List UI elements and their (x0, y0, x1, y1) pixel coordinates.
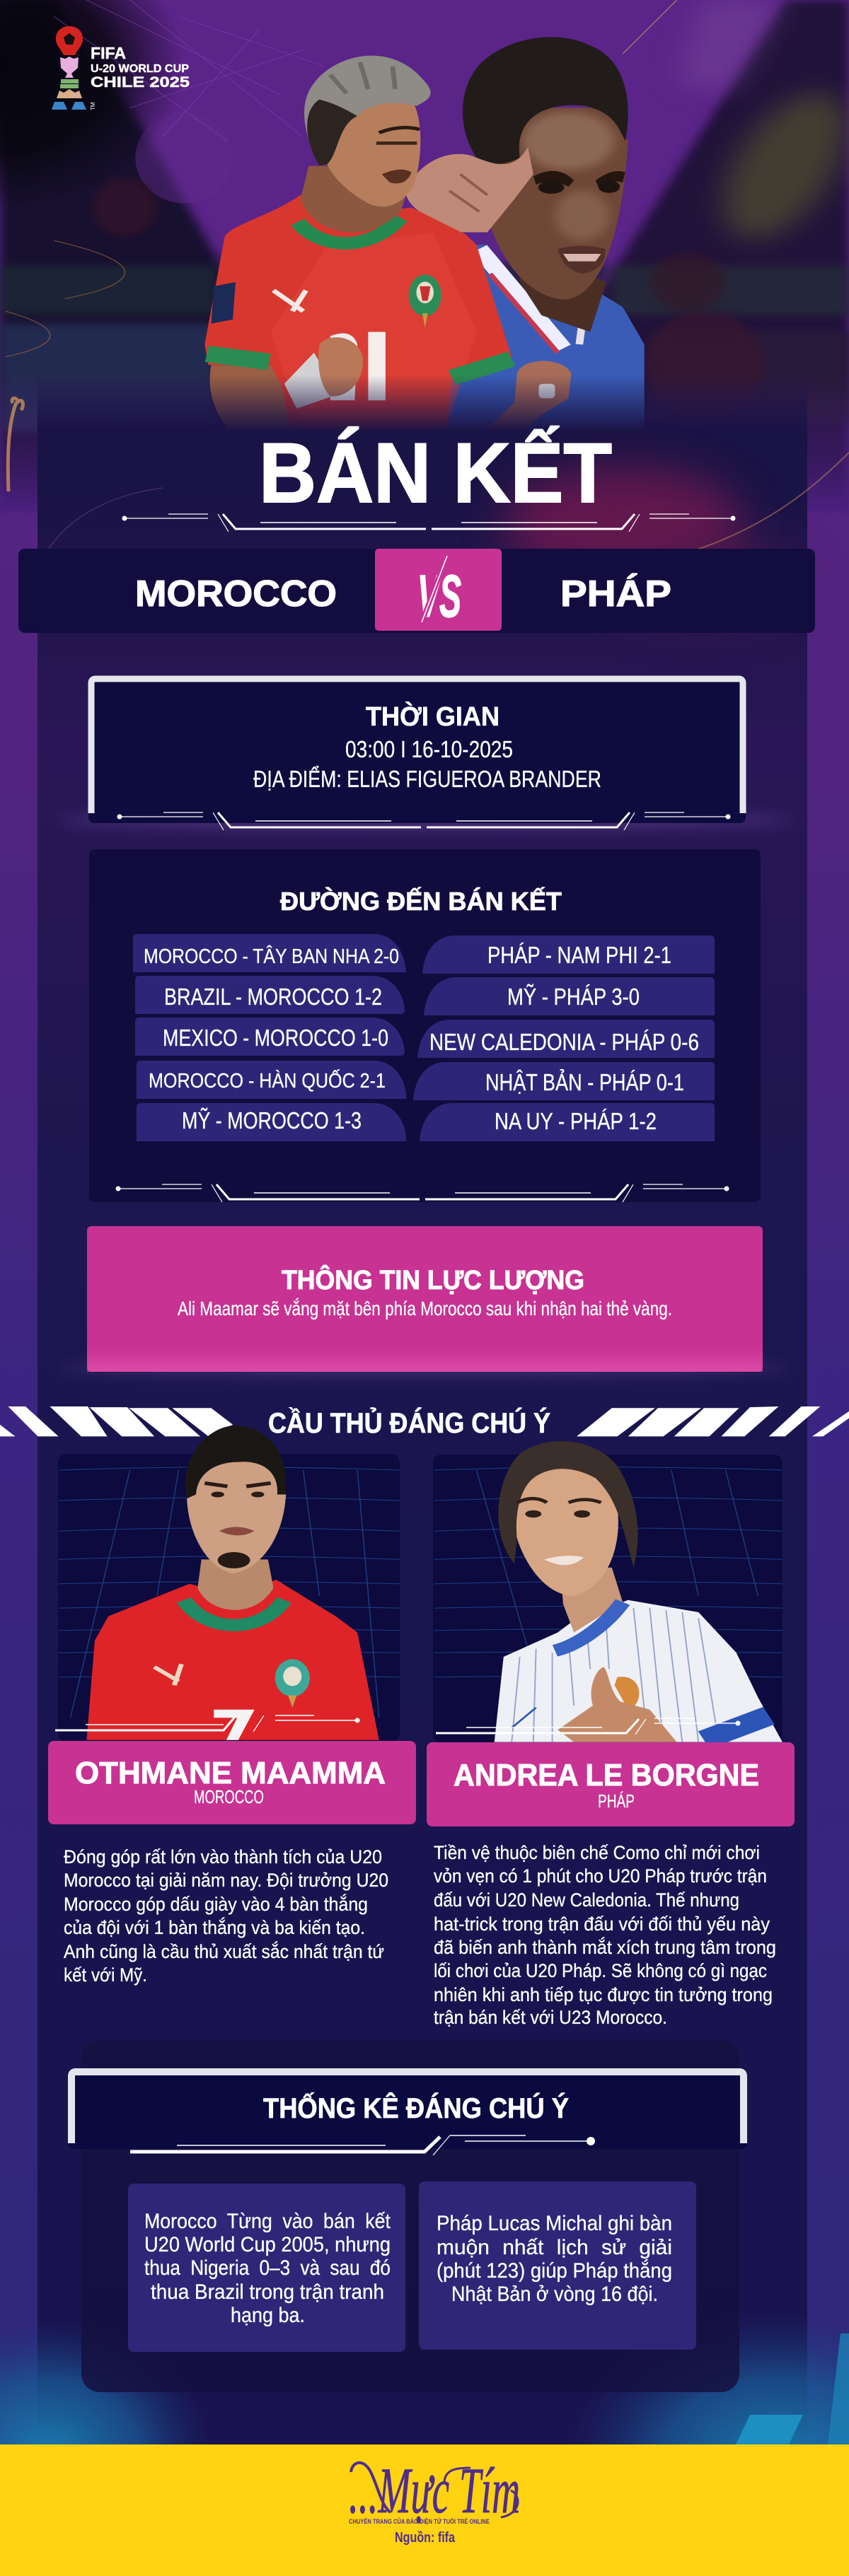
centre column (37, 488, 807, 2576)
player text: Đóng góp rất lớn vào thành tích của U20 (64, 1846, 382, 1867)
stat box: France: muộn nhất lịch sử giải (437, 2236, 672, 2259)
panel: Andrea Le Borgne (427, 1441, 795, 2028)
decorative grid lines (59, 1467, 400, 1718)
Morocco results: MỸ - MOROCCO 1-3 (182, 1107, 362, 1133)
stat box: Morocco: thua Nigeria 0–3 và sau đó (144, 2256, 391, 2280)
stat box: France: (phút 123) giúp Pháp thắng (437, 2259, 672, 2283)
stat box: Morocco: thua Brazil trong trận tranh (151, 2280, 384, 2304)
player text: của đội với 1 bàn thắng và ba kiến tạo. (64, 1916, 365, 1938)
player text: trận bán kết với U23 Morocco. (434, 2007, 667, 2028)
heading: squad news: THÔNG TIN LỰC LƯỢNG (282, 1264, 584, 1295)
panel: road to semifinal (89, 849, 761, 1202)
squad news text: Ali Maamar sẽ vắng mặt bên phía Morocco sau khi nhận hai thẻ vàng. (178, 1298, 672, 1319)
name plate: ANDREA LE BORGNE (454, 1758, 759, 1793)
stat box: Morocco (128, 2184, 405, 2352)
logo: Mực Tím (349, 2454, 520, 2527)
panel: squad news (57, 1226, 792, 1375)
hero background: stadium scene (0, 0, 849, 556)
player photo (86, 1426, 379, 1740)
name plate: OTHMANE MAAMMA (75, 1756, 386, 1790)
heading: players to watch: CẦU THỦ ĐÁNG CHÚ Ý (268, 1406, 550, 1439)
Morocco results (133, 934, 406, 1141)
hero lower fade (8, 375, 849, 622)
stat box: France: Nhật Bản ở vòng 16 đội. (451, 2283, 658, 2306)
player text: hat-trick trong trận đấu với đối thủ yếu này (434, 1913, 770, 1935)
France results: MỸ - PHÁP 3-0 (507, 984, 640, 1010)
stat box: Morocco: hạng ba. (231, 2304, 305, 2327)
logo: FIFA U-20 World Cup Chile 2025: CHILE 2025 (91, 74, 190, 91)
France results: NEW CALEDONIA - PHÁP 0-6 (429, 1029, 699, 1055)
player text: vỏn vẹn có 1 phút cho U20 Pháp trước trận (434, 1865, 767, 1887)
match bar (18, 549, 815, 633)
Morocco results: BRAZIL - MOROCCO 1-2 (164, 984, 382, 1010)
stat box: France (419, 2181, 696, 2350)
player text: kết với Mỹ. (64, 1964, 147, 1986)
player text (434, 1842, 776, 2028)
title: BÁN KẾT: BÁN KẾT (259, 426, 612, 520)
France results (413, 936, 715, 1141)
player text: Tiền vệ thuộc biên chế Como chỉ mới chơi (434, 1842, 760, 1863)
background: blue light at the bottom (0, 2326, 849, 2444)
VS badge: VS (417, 563, 461, 629)
stat box: Morocco: Morocco Từng vào bán kết (144, 2210, 391, 2233)
hero players (204, 37, 645, 440)
player text: nhiên khi anh tiếp tục được tin tưởng trong (434, 1984, 773, 2005)
panel: notable stats (68, 2040, 747, 2392)
panel: Othmane Maamma (48, 1426, 416, 1986)
name plate: PHÁP (598, 1790, 635, 1812)
section banner: players to watch (0, 1406, 849, 1439)
logo: FIFA U-20 World Cup Chile 2025: FIFA (91, 44, 126, 62)
France results: PHÁP - NAM PHI 2-1 (487, 942, 671, 968)
logo: FIFA U-20 World Cup Chile 2025: U-20 WORLD CUP (91, 63, 189, 75)
Morocco player (204, 56, 512, 440)
icon: trophy (52, 26, 86, 110)
logo: Mực Tím: ...Mực Tím (349, 2454, 520, 2527)
player text: Morocco góp dấu giày vào 4 bàn thắng (64, 1893, 368, 1915)
name plate (48, 1741, 416, 1824)
stat box: France: Pháp Lucas Michal ghi bàn (437, 2212, 672, 2235)
player text: Morocco tại giải năm nay. Đội trưởng U20 (64, 1870, 388, 1891)
team: Morocco: MOROCCO (135, 573, 337, 614)
decorative grid lines (434, 1467, 782, 1677)
heading: time: THỜI GIAN (366, 701, 499, 732)
logo: Mực Tím: CHUYÊN TRANG CỦA BÁO ĐIỆN TỬ TUỔI TRẺ ONLINE (349, 2517, 490, 2525)
header divider (130, 2135, 595, 2155)
date and time: 03:00 I 16-10-2025 (345, 736, 513, 762)
source: Nguồn: fifa (395, 2530, 456, 2546)
Morocco results: MOROCCO - TÂY BAN NHA 2-0 (144, 945, 399, 968)
Morocco results: MOROCCO - HÀN QUỐC 2-1 (149, 1068, 386, 1092)
player text: đã biến anh thành mắt xích trung tâm trong (434, 1936, 776, 1958)
card divider (436, 1718, 740, 1735)
card divider (55, 1715, 359, 1732)
panel: match time (57, 675, 792, 830)
stat box: Morocco: U20 World Cup 2005, nhưng (144, 2233, 391, 2256)
logo: FIFA U-20 World Cup Chile 2025 (52, 26, 190, 110)
VS badge (375, 549, 502, 631)
Morocco results: MEXICO - MOROCCO 1-0 (163, 1025, 388, 1051)
heading: road to semifinal: ĐƯỜNG ĐẾN BÁN KẾT (280, 886, 562, 916)
stats header: THỐNG KÊ ĐÁNG CHÚ Ý (263, 2092, 569, 2124)
player text: đấu với U20 New Caledonia. Thế nhưng (434, 1889, 739, 1911)
venue: ĐỊA ĐIỂM: ELIAS FIGUEROA BRANDER (253, 766, 601, 792)
footer (0, 2444, 849, 2576)
team: Pháp: PHÁP (560, 573, 671, 614)
player text (64, 1846, 388, 1986)
name plate: MOROCCO (194, 1786, 264, 1807)
France results: NHẬT BẢN - PHÁP 0-1 (485, 1069, 684, 1095)
player text: Anh cũng là cầu thủ xuất sắc nhất trận tứ (64, 1940, 384, 1962)
stats header (68, 2068, 747, 2149)
France results: NA UY - PHÁP 1-2 (495, 1108, 657, 1134)
French player (406, 37, 645, 440)
player text: lối chơi của U20 Pháp. Sẽ không có gì ngạc (434, 1960, 767, 1981)
name plate (427, 1742, 795, 1826)
title divider (122, 514, 736, 532)
player photo (495, 1441, 782, 1742)
logo: FIFA U-20 World Cup Chile 2025: TM (90, 102, 96, 110)
